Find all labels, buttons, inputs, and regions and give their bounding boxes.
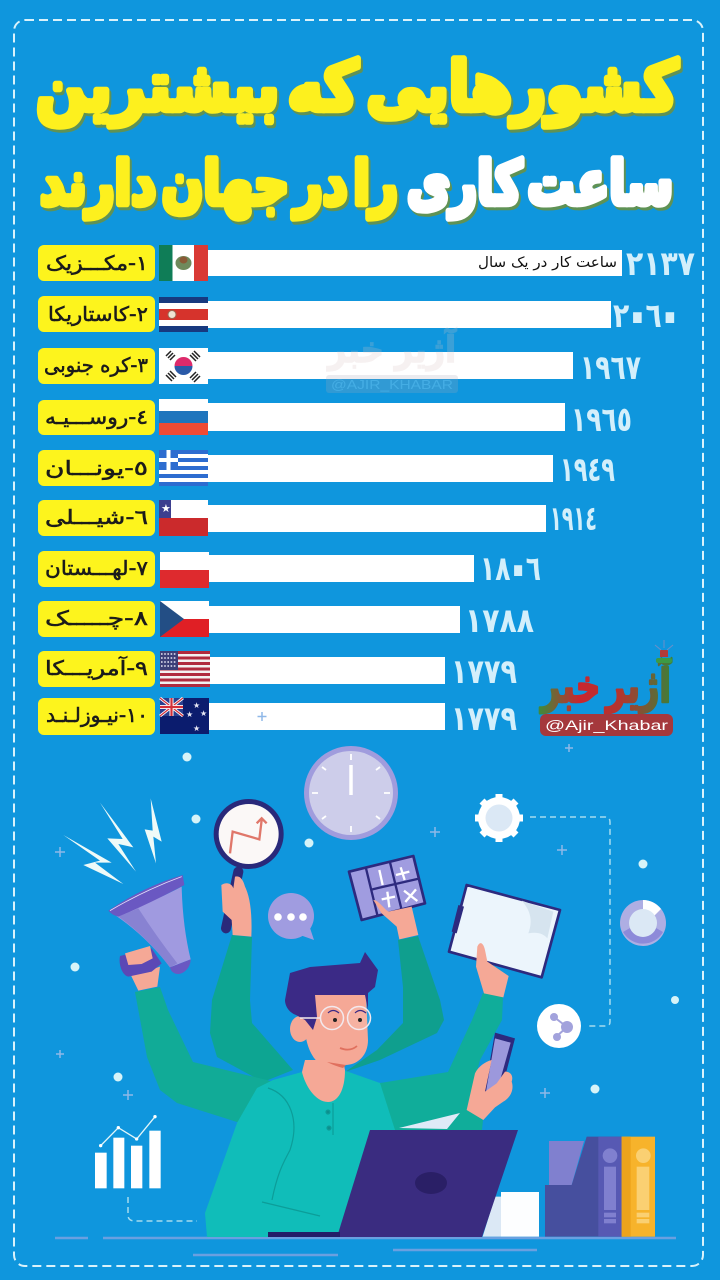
jaw shadow (327, 1062, 346, 1068)
hand (373, 900, 418, 939)
label: ٤-روســـیـه (45, 405, 148, 429)
phone body (483, 1033, 515, 1103)
eyes (333, 1018, 362, 1022)
bar (205, 703, 445, 730)
right arm with clipboard and phone (380, 993, 503, 1130)
torso (205, 1070, 395, 1237)
label: ٧-لهـــستان (45, 556, 148, 580)
megaphone shaded side (118, 908, 177, 967)
label (38, 245, 155, 281)
shirt details (262, 1088, 333, 1216)
icon: lightning bolts (63, 798, 162, 884)
bar (205, 352, 573, 379)
phone screen (486, 1038, 511, 1095)
left arm with megaphone (135, 987, 300, 1122)
back arm with calculator (345, 936, 444, 1072)
wrist (130, 967, 160, 991)
label (38, 601, 155, 637)
glasses (300, 1006, 370, 1030)
ear (290, 1016, 310, 1042)
label: ٩-آمریـــکا (45, 655, 148, 680)
clipboard board (449, 885, 560, 977)
laptop screen (337, 1130, 518, 1237)
megaphone grip (120, 948, 162, 977)
logo wordmark: آژیر خبر (540, 658, 672, 713)
bar chart (38, 244, 695, 739)
flag: New Zealand: ★ (193, 701, 200, 710)
value: ١٩٤٩ (560, 450, 615, 490)
bar (205, 301, 611, 328)
label (38, 651, 155, 687)
watermark: آژیر خبر (326, 327, 457, 371)
flag: New Zealand: ★ (193, 724, 200, 733)
icon: books (483, 1137, 655, 1237)
mouth (340, 1046, 357, 1050)
bar (205, 657, 445, 684)
label (38, 400, 155, 435)
bar (205, 250, 622, 276)
label: ٣-کره جنوبی (44, 353, 148, 377)
eyebrows (328, 1010, 366, 1013)
label: ٦-شیـــلی (45, 505, 148, 529)
magnifier with hand (214, 799, 284, 937)
hair (285, 952, 378, 1030)
cuff (399, 1113, 460, 1129)
value: ٢٠٦٠ (613, 296, 678, 336)
watermark (326, 327, 458, 393)
label: ٥-یونـــان (45, 456, 148, 480)
laptop (268, 1130, 518, 1237)
value: ١٩٦٥ (571, 400, 632, 440)
icon: gear (475, 794, 523, 842)
megaphone bell (108, 875, 184, 917)
row 3 South Korea (38, 348, 641, 388)
label: ١٠-نیـوزلـنـد (46, 703, 148, 727)
calculator body (349, 856, 425, 920)
label (38, 348, 155, 384)
icon: share (537, 1004, 581, 1048)
value: ١٧٧٩ (451, 652, 517, 692)
icon: mini bar chart (95, 1115, 161, 1188)
megaphone mouthpiece (170, 959, 191, 974)
row 4 Russia (38, 399, 632, 440)
value: ١٧٨٨ (465, 601, 534, 641)
value: ١٨٠٦ (480, 549, 541, 589)
bar (205, 403, 565, 431)
flag: Chile (159, 500, 208, 536)
bar (205, 455, 553, 482)
watermark: @AJIR_KHABAR (331, 377, 453, 392)
icon: clock (304, 746, 398, 840)
laptop base (268, 1232, 340, 1237)
fingers (125, 946, 153, 965)
value: ١٧٧٩ (451, 699, 517, 739)
value: ١٩٦٧ (580, 348, 641, 388)
flag: South Korea (159, 348, 208, 384)
flag: Costa Rica (159, 297, 208, 332)
magnifier handle (226, 872, 238, 928)
flag: Czechia (160, 601, 209, 637)
bar caption: ساعت کار در یک سال (478, 255, 617, 271)
row 2 Costa Rica (38, 296, 678, 336)
flag: New Zealand (160, 698, 209, 734)
row 1 Mexico (38, 244, 695, 284)
magnifier lens (214, 799, 284, 869)
title line 2 yellow part: را در جهان دارند (40, 149, 398, 219)
value: ٢١٣٧ (626, 244, 695, 284)
flag: Greece (159, 450, 208, 486)
back arm with magnifier (210, 935, 293, 1082)
icon: chat bubble (268, 893, 314, 940)
row 8 Czech (38, 601, 534, 641)
person (135, 935, 518, 1237)
flag: Chile: ★ (161, 502, 171, 515)
row 9 USA (38, 651, 517, 692)
calculator symbols (379, 867, 417, 907)
icon: donut chart (620, 900, 666, 946)
trend arrow (230, 818, 267, 853)
megaphone with hand (108, 875, 191, 991)
label: ١-مکـــزیک (46, 251, 148, 275)
megaphone body (115, 887, 191, 967)
logo handle badge: @Ajir_Khabar (545, 717, 668, 733)
calculator with hand (349, 856, 425, 939)
laptop logo (415, 1172, 447, 1194)
flag: New Zealand: ★ (200, 709, 207, 718)
bar (205, 606, 460, 633)
head (285, 952, 378, 1068)
hand (467, 1060, 513, 1120)
label (38, 698, 155, 735)
title (36, 48, 678, 219)
clipboard with hand (449, 885, 560, 997)
calculator keys (366, 862, 420, 915)
label: ٢-کاستاریکا (48, 302, 148, 326)
row 5 Greece (38, 450, 615, 490)
flag: USA (160, 651, 210, 687)
flag: Russia (159, 399, 208, 435)
magnifier glass (219, 804, 279, 864)
flag: Mexico (159, 245, 208, 281)
floor lines (55, 1238, 676, 1255)
bell rim highlight (110, 877, 182, 911)
label (38, 450, 155, 486)
face (305, 995, 368, 1065)
decorative dots and plus signs (55, 712, 679, 1100)
phone with hand (467, 1033, 515, 1120)
neck (302, 1060, 345, 1102)
dashed connector lines (128, 817, 610, 1221)
flag: Poland (160, 552, 209, 588)
row 6 Chile (38, 499, 597, 539)
logo (540, 640, 673, 736)
label (38, 296, 155, 332)
bar (205, 505, 546, 532)
label (38, 551, 155, 587)
value: ١٩١٤ (550, 499, 597, 539)
hand (221, 876, 252, 937)
hand (476, 943, 509, 997)
clipboard clip (452, 905, 464, 933)
label: ٨-چـــــک (45, 606, 148, 630)
row 7 Poland (38, 549, 541, 589)
clipboard page shade (522, 901, 553, 938)
label (38, 500, 155, 536)
flag: New Zealand: ★ (186, 710, 193, 719)
bar (205, 555, 474, 582)
row 10 New Zealand (38, 698, 517, 739)
logo beacon (655, 640, 673, 663)
